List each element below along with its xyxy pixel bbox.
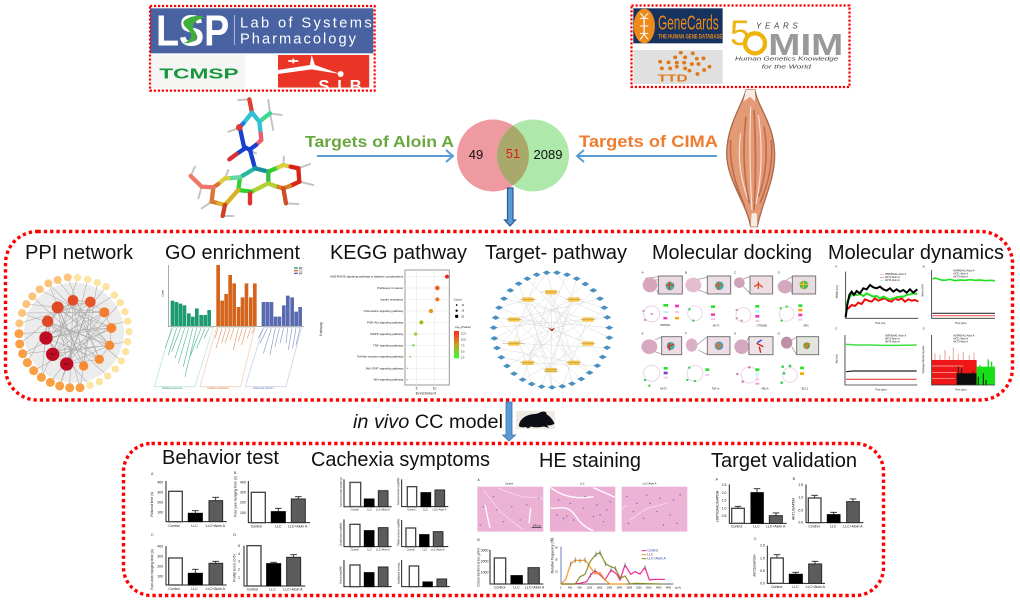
docking panel G: G	[734, 332, 737, 336]
docking panel A	[642, 270, 682, 327]
micrograph: LLC+Aloin A	[622, 483, 687, 532]
chart: behavior test bars	[150, 471, 310, 592]
docking panel E: E	[642, 332, 644, 336]
bar chart C: AKT3: LLC	[792, 585, 799, 589]
bar chart B: four paw hanging: 100	[240, 511, 246, 515]
chart: SASA: Time (psc)	[955, 322, 967, 325]
docking panel E	[641, 332, 682, 391]
logo text: Lab of Systems Pharmacology: Lab of Systems	[240, 15, 372, 31]
logo: TCMSP: TCMSP	[159, 67, 239, 83]
bar chart: gastrocnemius: Control	[407, 508, 416, 511]
chart: GO enrichment: Cellular component	[207, 387, 229, 390]
chart: RMSD: RMSD (nm)	[836, 285, 839, 298]
line chart: relative frequency: LLC+Aloin A	[647, 557, 667, 561]
bar chart B: AKT1: 1.0	[798, 496, 803, 500]
chart: KEGG bubble plot: 7.5	[461, 344, 465, 347]
bar chart: gastrocnemius	[397, 478, 448, 511]
chart: GO enrichment	[154, 265, 304, 390]
bar chart: quadriceps: LLC+Aloin A	[376, 548, 390, 551]
line chart: relative frequency: LLC	[647, 553, 654, 557]
chart: SASA: AKT3-Aloin A	[953, 276, 968, 279]
line chart: relative frequency: 1600	[597, 587, 603, 590]
bar chart C: fore-limb hanging: C	[151, 533, 154, 537]
bar chart: quadriceps: Control	[351, 548, 359, 551]
panel: left database logos: Pharmacology	[240, 31, 357, 47]
bar chart: cross-section area	[476, 548, 545, 589]
line chart: relative frequency: 30	[555, 546, 558, 549]
logo: TTD	[633, 50, 723, 84]
chart: hydrogen bonds: Time (psc)	[955, 389, 967, 392]
line chart: relative frequency: 3600	[646, 587, 652, 590]
chart: hydrogen bonds	[922, 326, 995, 392]
chart: RMSD: Time (ns)	[875, 322, 886, 325]
chart: PPI network: TP53	[51, 354, 55, 356]
chart: KEGG bubble plot: Count	[454, 297, 462, 301]
micrograph: LLC+Aloin A: LLC+Aloin A	[643, 483, 657, 486]
bar chart: gastrocnemius: LLC+Aloin A	[433, 508, 447, 511]
bar chart: quadriceps: LLC	[367, 548, 372, 551]
chart: KEGG bubble plot: Pathways in cancer	[377, 286, 403, 290]
Venn diagram	[457, 120, 569, 192]
chart: KEGG bubble plot: 15	[461, 310, 465, 313]
chart: GO enrichment: Molecular function	[253, 387, 274, 390]
chart: KEGG bubble plot: TNF signaling pathway	[373, 343, 404, 347]
panel: HE micrographs: A	[477, 478, 480, 482]
line chart: relative frequency: 20	[555, 558, 558, 561]
bar chart C: AKT3: LLC+Aloin A	[806, 585, 826, 589]
heading: PPI network: PPI network	[25, 242, 134, 264]
line chart: relative frequency: Relative frequency (%)	[550, 538, 554, 573]
bar chart C: AKT3: AKT3/GAPDH	[753, 554, 757, 577]
bar chart B: AKT1	[791, 477, 863, 528]
bar chart B: four paw hanging: LLC+Aloin A	[288, 525, 308, 529]
bar chart C: AKT3: 1.5	[760, 544, 765, 548]
bar chart A: rotarod: Control	[168, 524, 180, 528]
arrow: Aloin A to Venn	[317, 150, 453, 162]
chart: SASA: AKT1-Aloin A	[953, 273, 968, 276]
count: 49: 49	[469, 147, 483, 162]
chart: GO enrichment: BP	[299, 267, 303, 270]
docking panel B: AKT1	[713, 324, 720, 328]
docking panel B: B	[685, 270, 687, 274]
logo: GeneCards: THE HUMAN GENE DATABASE	[658, 34, 723, 41]
chart: KEGG bubble plot: 10	[433, 387, 437, 391]
docking panel H	[778, 332, 819, 390]
bar chart D: frailty score: 3	[238, 560, 240, 564]
chart: Rg	[835, 326, 917, 392]
chart: molecular dynamics	[835, 264, 995, 392]
line chart: relative frequency: 0	[560, 587, 562, 590]
count: 2089: 2089	[534, 147, 562, 162]
docking panel C: C	[734, 270, 737, 274]
bar chart B: four paw hanging: 300	[240, 490, 246, 494]
heading: GO enrichment: GO enrichment	[165, 242, 300, 264]
bar chart: quadriceps: Quadriceps (mg/BW)	[340, 523, 343, 546]
line chart: relative frequency: 10	[555, 570, 558, 573]
logo: 50 years OMIM: MIM	[768, 28, 843, 62]
chart: KEGG bubble plot: 5	[416, 387, 418, 391]
bar chart: gastrocnemius: Gastrocnemius (mg/BW)	[397, 478, 400, 505]
bar chart A: HSP90AA1: 1.0	[722, 506, 727, 510]
bar chart: cross-section area: Cross-section area (μm²)	[476, 548, 480, 587]
chart: KEGG bubble plot: PI3K-Akt signaling pathway	[367, 320, 404, 324]
label: Targets of CIMA: Targets of CIMA	[579, 132, 718, 151]
icon: Aloin A molecule	[191, 99, 313, 216]
bar chart C: fore-limb hanging	[150, 533, 227, 591]
line chart: relative frequency: (μm²)	[675, 587, 681, 590]
chart: KEGG bubble plot: Wnt signaling pathway	[373, 378, 404, 382]
heading: Molecular dynamics: Molecular dynamics	[828, 242, 1004, 264]
line chart: relative frequency: 400	[568, 587, 573, 590]
bar chart C: fore-limb hanging: Control	[168, 587, 180, 591]
docking panel H: BCL2	[802, 386, 809, 390]
bar chart B: AKT1: LLC+Aloin A	[843, 524, 863, 528]
logo: GeneCards	[633, 8, 723, 43]
chart: Rg: Rg (nm)	[836, 354, 839, 363]
bar chart A: rotarod: 400	[157, 480, 163, 484]
chart: KEGG bubble plot: 10.0	[461, 338, 466, 341]
panel: HE micrographs: C	[550, 538, 553, 542]
chart: GO enrichment: Biological process	[163, 387, 183, 390]
panel: network analysis	[6, 232, 1012, 400]
docking panel A: A	[642, 270, 644, 274]
heading: Target validation: Target validation	[711, 450, 857, 472]
chart: KEGG bubble plot: 2.5	[461, 356, 465, 359]
chart: SASA: B	[923, 264, 925, 268]
bar chart B: four paw hanging: LLC	[275, 525, 282, 529]
bar chart: cross-section area: Control	[494, 585, 505, 589]
chart: KEGG bubble plot: Insulin resistance	[380, 297, 404, 301]
panel: CC model experiments	[124, 444, 884, 596]
bar chart B: four paw hanging: 200	[240, 500, 246, 504]
bar chart B: four paw hanging: B	[234, 471, 237, 475]
bar chart B: four paw hanging	[234, 471, 310, 529]
panel: HE micrographs	[477, 478, 687, 542]
line chart: relative frequency: 1200	[587, 587, 593, 590]
bar chart: tibialis anterior: Control	[407, 548, 415, 551]
bar chart: cross-section area: 2000	[481, 559, 488, 563]
chart: KEGG bubble plot	[319, 270, 471, 396]
chart: KEGG bubble plot: 12.5	[461, 332, 466, 335]
micrograph: Control	[477, 483, 543, 532]
bar chart D: frailty score: 2	[238, 568, 240, 572]
chart: PPI network: AKT1	[65, 363, 69, 366]
chart: RMSD	[835, 264, 918, 325]
bar chart A: HSP90AA1: 2.0	[722, 491, 727, 495]
logo: 50 years OMIM: Human Genetics Knowledge	[735, 57, 838, 63]
bar chart: tumor-free body weight: Tumor-free body weight (g)	[340, 477, 343, 507]
docking panel D: D	[778, 270, 781, 274]
chart: molecular docking panels	[641, 270, 819, 391]
arrow: Venn to analysis panel	[504, 188, 516, 226]
heading: Target- pathway: Target- pathway	[485, 242, 627, 264]
bar chart A: HSP90AA1: LLC+Aloin A	[766, 525, 786, 529]
bar chart A: HSP90AA1: 2.5	[722, 483, 727, 487]
bar chart C: fore-limb hanging: Fore-limb hanging time (s)	[150, 549, 154, 590]
bar chart B: AKT1: 0.0	[798, 521, 803, 525]
panel: left database logos	[150, 6, 375, 96]
logo: 50 years OMIM: 5	[730, 14, 750, 53]
bar chart A: HSP90AA1	[715, 478, 787, 529]
line chart: relative frequency: 2800	[627, 587, 633, 590]
bar chart C: fore-limb hanging: LLC	[191, 587, 198, 591]
bar chart C: fore-limb hanging: 100	[157, 574, 163, 578]
bar chart: tumor-free body weight: LLC+Aloin A	[376, 508, 390, 511]
docking panel G: RELA	[762, 386, 769, 390]
bar chart: epididymal fat: Epididymal fat (mg)	[397, 562, 400, 584]
bar chart B: AKT1: LLC	[830, 524, 837, 528]
micrograph: LLC: LLC	[580, 483, 585, 486]
chart: hydrogen bonds: Hydrogen Bonds Number	[922, 345, 925, 373]
docking panel F	[685, 332, 730, 390]
bar chart: cross-section area: 1000	[481, 571, 488, 575]
bar chart B: AKT1: Control	[808, 524, 820, 528]
chart: target-pathway network	[490, 270, 613, 390]
chart: KEGG bubble plot: Toll-like receptor signaling pathway	[357, 355, 404, 359]
heading: HE staining: HE staining	[539, 450, 641, 472]
docking panel A: HSP90A	[660, 323, 670, 327]
bar chart D: frailty score: LLC	[269, 588, 276, 592]
docking panel E: AKT3	[660, 387, 667, 391]
chart: RMSD: A	[835, 264, 837, 268]
icon: mouse	[516, 411, 555, 429]
chart: Rg: AKT3-Aloin A	[885, 341, 900, 344]
logo: GeneCards: GeneCards	[658, 12, 719, 34]
bar chart: tibialis anterior: Tibialis anterior (mg/BW)	[397, 519, 400, 546]
bar chart B: four paw hanging: Control	[251, 525, 262, 529]
bar chart B: AKT1: AKT1/GAPDH	[791, 497, 795, 520]
bar chart A: rotarod	[150, 472, 227, 528]
bar chart B: four paw hanging: 400	[240, 480, 246, 484]
chart: PPI network	[19, 277, 129, 388]
chart: RMSD: AKT1-Aloin A	[885, 276, 900, 279]
bar chart: tumor-free body weight: LLC	[367, 508, 372, 511]
bar chart A: HSP90AA1: HSP90AA1/GAPDH	[715, 490, 719, 522]
chart: KEGG bubble plot: AGE-RAGE signaling pathway in diabetic complications	[330, 275, 404, 279]
bar chart: cross-section area: LLC+Aloin A	[525, 585, 545, 589]
bar chart A: rotarod: 200	[157, 500, 163, 504]
bar chart C: fore-limb hanging: 300	[157, 554, 163, 558]
logo: 50 years OMIM: YEARS	[756, 21, 801, 30]
chart: KEGG bubble plot: JAK-STAT signaling pathway	[365, 366, 404, 370]
chart: KEGG bubble plot: Enrichment	[416, 391, 437, 396]
chart: RMSD: AKT3-Aloin A	[885, 279, 900, 282]
chart: RMSD: HSP90AA1-Aloin A	[885, 273, 906, 276]
label: in vivo CC model: in vivo CC model	[353, 412, 503, 433]
chart: KEGG bubble plot: 5.0	[461, 350, 465, 353]
bar chart D: frailty score: 1	[238, 576, 240, 580]
docking panel C: CTNNB1	[757, 324, 768, 328]
panel: right database logos	[632, 6, 850, 87]
chart: KEGG bubble plot: −log₁₀(Pvalue)	[454, 325, 471, 329]
chart: Rg: C	[835, 326, 838, 330]
bar chart A: rotarod: LLC+Aloin A	[206, 524, 226, 528]
bar chart: gastrocnemius: LLC	[423, 508, 428, 511]
heading: Behavior test: Behavior test	[162, 447, 279, 469]
docking panel D	[778, 270, 816, 328]
heading: Cachexia symptoms: Cachexia symptoms	[311, 449, 490, 471]
line chart: relative frequency: 4400	[666, 587, 672, 590]
bar chart C: AKT3: Control	[771, 585, 782, 589]
chart: SASA: Sasa (nm²)	[921, 284, 924, 297]
chart: SASA	[921, 264, 995, 325]
bar chart A: rotarod: Rotarod time (s)	[150, 492, 154, 517]
bar chart A: HSP90AA1: A	[716, 478, 719, 482]
bar chart B: four paw hanging: Four paw hanging time (s)	[234, 476, 238, 517]
micrograph: Control: Control	[505, 483, 513, 486]
line chart: relative frequency: 3200	[636, 587, 642, 590]
bar chart B: AKT1: 0.5	[798, 508, 803, 512]
logo: SIB	[278, 55, 370, 88]
logo: SIB: SIB	[318, 77, 362, 96]
line chart: relative frequency: 4000	[656, 587, 662, 590]
chart: PPI network: IL6	[45, 338, 47, 340]
bar chart A: rotarod: 100	[157, 510, 163, 514]
bar chart A: HSP90AA1: LLC	[753, 525, 760, 529]
line chart: relative frequency: 2000	[607, 587, 613, 590]
micrograph: Control: 100 μm	[533, 525, 541, 528]
docking panel F: TNF-α	[712, 386, 720, 390]
chart: hydrogen bonds: AKT3-Aloin A	[953, 341, 968, 344]
bar chart D: frailty score: Control	[247, 588, 258, 592]
heading: KEGG pathway: KEGG pathway	[330, 242, 467, 264]
bar chart C: AKT3: 0.0	[760, 582, 765, 586]
arrow: analysis to CC model	[502, 402, 516, 441]
line chart: relative frequency: 800	[578, 587, 582, 590]
logo: LSP: LSP	[156, 7, 229, 55]
bar chart D: frailty score: LLC+Aloin A	[283, 588, 303, 592]
chart: KEGG bubble plot: Chemokine signaling pathway	[364, 309, 404, 313]
logo: 50 years OMIM: for the World	[762, 64, 812, 70]
docking panel H: H	[778, 332, 780, 336]
bar chart C: AKT3: 0.5	[760, 569, 765, 573]
chart: hydrogen bonds: AKT1-Aloin A	[953, 338, 968, 341]
bar chart A: HSP90AA1: Control	[731, 525, 742, 529]
bar chart: soleus: Soleus (mg/BW)	[340, 566, 343, 584]
panel: HE micrographs: B	[477, 538, 480, 542]
bar chart D: frailty score: 5	[238, 544, 240, 548]
chart: KEGG bubble plot: 10	[461, 304, 465, 307]
bar chart: cross-section area: LLC	[513, 585, 520, 589]
bar chart D: frailty score: D	[233, 533, 236, 537]
chart: Rg: AKT1-Aloin A	[885, 338, 900, 341]
bar chart: tibialis anterior: LLC+Aloin A	[431, 548, 445, 551]
docking panel F: F	[685, 332, 687, 336]
label: Targets of Aloin A: Targets of Aloin A	[305, 134, 454, 151]
chart: Rg: HSP90AA1-Aloin A	[885, 335, 906, 338]
bar chart B: AKT1: 1.5	[798, 483, 803, 487]
docking panel C	[734, 270, 773, 328]
chart: GO enrichment: Count	[161, 290, 164, 297]
micrograph: LLC	[550, 483, 615, 532]
bar chart C: AKT3: C	[754, 537, 757, 541]
chart: KEGG bubble plot: 20	[461, 315, 465, 318]
bar chart C: fore-limb hanging: 200	[157, 564, 163, 568]
chart: cachexia bars	[340, 477, 450, 587]
logo: TTD: TTD	[658, 73, 688, 84]
arrow: CIMA to Venn	[577, 150, 717, 162]
chart: KEGG bubble plot: MAPK signaling pathway	[370, 332, 404, 336]
bar chart D: frailty score: 4	[238, 552, 240, 556]
chart: hydrogen bonds: D	[923, 326, 926, 330]
bar chart: tibialis anterior	[397, 519, 448, 551]
bar chart: quadriceps	[340, 519, 392, 551]
chart: KEGG bubble plot: Pathway	[319, 322, 323, 336]
bar chart: tumor-free body weight	[340, 477, 392, 511]
bar chart: cross-section area: 3000	[481, 548, 488, 552]
icon: muscle	[727, 90, 775, 227]
bar chart A: rotarod: A	[151, 472, 154, 476]
bar chart A: HSP90AA1: 1.5	[722, 499, 727, 503]
bar chart C: fore-limb hanging: LLC+Aloin A	[206, 587, 226, 591]
bar chart D: frailty score: Frailty score (0-5)	[232, 554, 236, 582]
chart: target validation bars	[715, 477, 863, 589]
chart: GO enrichment: MF	[299, 272, 303, 275]
docking panel G	[734, 332, 773, 390]
docking panel D: SRC	[803, 324, 809, 328]
bar chart D: frailty score	[232, 533, 305, 592]
bar chart: tumor-free body weight: Control	[351, 508, 359, 511]
line chart: relative frequency: Control	[647, 549, 658, 553]
bar chart A: rotarod: 300	[157, 490, 163, 494]
bar chart B: AKT1: B	[793, 477, 796, 481]
bar chart C: AKT3: 1.0	[760, 556, 765, 560]
line chart: relative frequency	[550, 538, 681, 590]
chart: hydrogen bonds: HSP90AA1-Aloin A	[953, 335, 975, 338]
bar chart A: rotarod: LLC	[191, 524, 198, 528]
count: 51: 51	[506, 146, 520, 161]
bar chart A: HSP90AA1: 0.5	[722, 514, 727, 518]
logo: 50 years OMIM	[730, 14, 843, 70]
heading: Molecular docking: Molecular docking	[652, 242, 812, 264]
chart: GO enrichment: CC	[299, 270, 303, 273]
chart: Rg: Time (psc)	[875, 389, 887, 392]
chart: SASA: HSP90AA1-Aloin A	[953, 270, 975, 273]
line chart: relative frequency: 2400	[617, 587, 623, 590]
docking panel B	[685, 270, 731, 328]
bar chart C: fore-limb hanging: 400	[157, 544, 163, 548]
bar chart: tibialis anterior: LLC	[423, 548, 427, 551]
bar chart C: AKT3	[753, 537, 826, 589]
